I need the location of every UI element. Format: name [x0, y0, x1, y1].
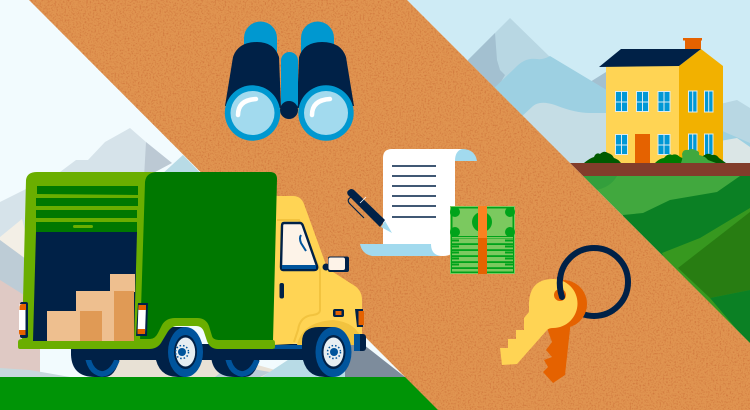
bushes: [584, 149, 726, 163]
pen: [347, 189, 392, 233]
left background: mountains: [0, 0, 405, 380]
right tail light: [136, 303, 148, 336]
scroll top curl: [455, 149, 477, 161]
head light: [355, 309, 364, 327]
text lines: [392, 166, 436, 217]
cab door outline: [277, 220, 320, 342]
chimney: [683, 38, 702, 50]
top banknote: [450, 207, 515, 237]
yellow key: [500, 279, 578, 365]
cardboard boxes: [47, 274, 135, 341]
box side: [140, 172, 277, 341]
door handle strip: [73, 225, 93, 228]
scroll bottom curl: [360, 244, 442, 256]
side mirror: [322, 256, 349, 272]
wheel arch on cab: [297, 320, 362, 345]
cargo opening: [33, 232, 137, 341]
front wheel: [302, 327, 352, 377]
bumper: [354, 334, 366, 351]
key hole: [554, 289, 566, 301]
house front wall: [606, 66, 679, 163]
eyepieces: [244, 22, 334, 55]
door handle: [280, 283, 284, 298]
icon: binoculars: [225, 22, 354, 141]
bottom rail with wheel arch: [18, 318, 275, 349]
paper: [383, 149, 462, 256]
icon: yellow house: [584, 38, 726, 163]
stacked note edges: [452, 237, 513, 272]
cab sill: [274, 345, 312, 349]
window: [281, 223, 317, 270]
left lens: [225, 85, 280, 141]
truck: [18, 172, 366, 377]
right lens: [298, 85, 354, 141]
left tail light: [19, 302, 28, 338]
ground: green strip: [0, 377, 445, 410]
rear wheels: [71, 345, 260, 377]
roof: [599, 49, 701, 67]
barrels: [225, 42, 354, 108]
center bridge: [280, 52, 298, 119]
cab: [270, 196, 362, 345]
box frame: [18, 172, 160, 342]
door: [635, 134, 650, 163]
ring front segment: [560, 278, 562, 297]
icon: stack of cash: [450, 206, 515, 274]
front axle wheel of rear pair: [155, 327, 203, 377]
chassis: [72, 344, 342, 360]
icon: contract document: [347, 149, 477, 256]
paper band: [478, 206, 487, 274]
house side wall: [679, 49, 723, 163]
windows: [615, 91, 713, 155]
marker light: [333, 309, 344, 317]
key ring: [560, 248, 628, 316]
icon: keys on a ring: [500, 248, 628, 383]
roller door: [36, 186, 138, 233]
right background: sky and mountains: [400, 0, 750, 350]
orange key: [539, 280, 587, 383]
